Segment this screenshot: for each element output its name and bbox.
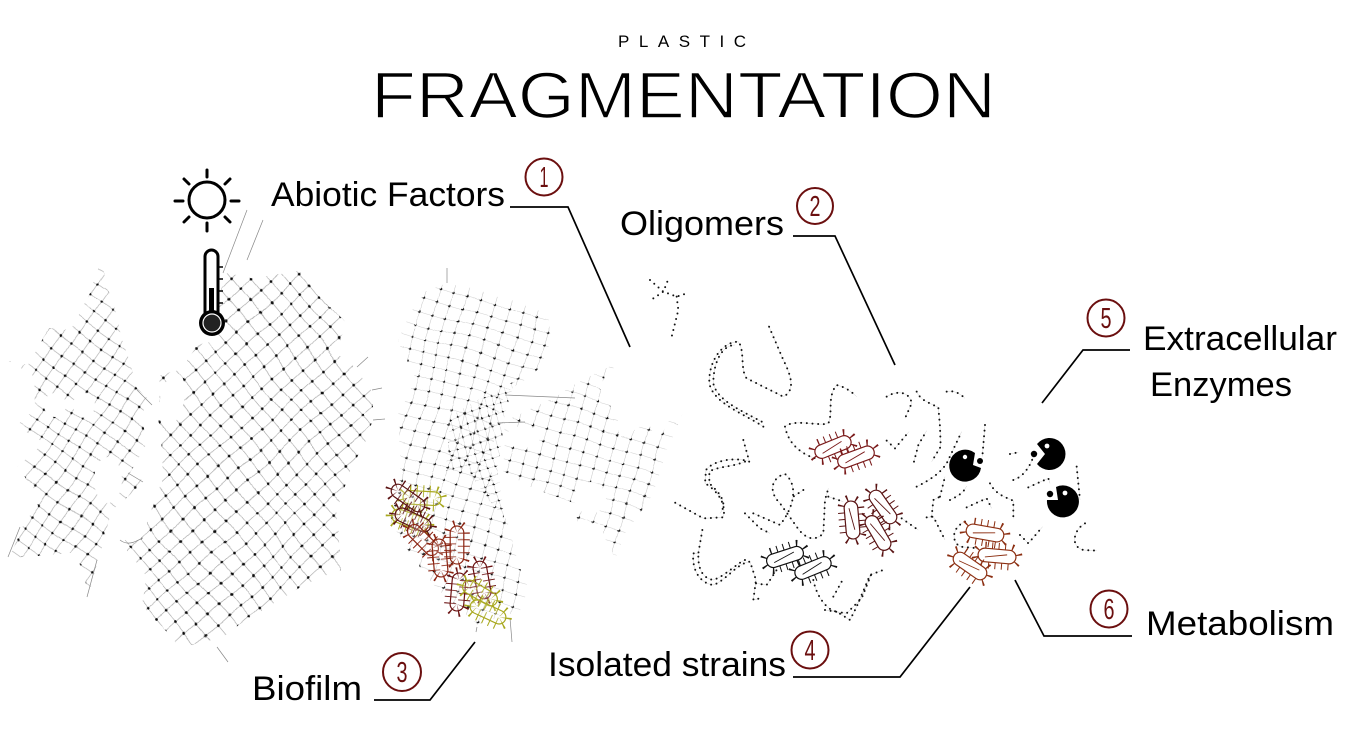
callout 6: metabolism — [1015, 580, 1334, 643]
polymer mesh: right fragment — [497, 360, 682, 560]
callout 6: metabolism: Metabolism — [1146, 605, 1334, 643]
callout 2: oligomers: Oligomers — [620, 205, 784, 243]
callout 5: extracellular enzymes: Enzymes — [1150, 366, 1292, 404]
callout 1: abiotic factors: Abiotic Factors — [271, 176, 505, 214]
small oligomer star — [650, 277, 687, 337]
callout 2: oligomers — [620, 188, 895, 365]
enzyme: pacman 2 — [1031, 438, 1065, 470]
callout 5: extracellular enzymes: 5 — [1100, 303, 1112, 335]
heading: fragmentation: FRAGMENTATION — [371, 58, 996, 132]
enzyme: pacman 3 — [1047, 485, 1079, 517]
callout 6: metabolism: 6 — [1104, 594, 1114, 626]
callout 3: biofilm: Biofilm — [252, 670, 362, 708]
callout 1: abiotic factors: 1 — [540, 162, 548, 194]
bacteria: orange-red cluster — [951, 523, 1017, 582]
callout 4: isolated strains: 4 — [804, 635, 816, 667]
callout 5: extracellular enzymes — [1042, 300, 1337, 404]
bacteria: dark red cluster top — [813, 434, 876, 470]
callout 5: extracellular enzymes: Extracellular — [1143, 320, 1337, 358]
subtitle: plastic: PLASTIC — [618, 32, 746, 51]
icon: sun — [175, 170, 239, 231]
oligomer chains — [675, 325, 1097, 620]
icon: thermometer — [199, 250, 225, 336]
title — [371, 32, 996, 132]
polymer mesh: left fragment — [7, 258, 152, 597]
polymer mesh: main fragment — [120, 210, 385, 662]
bacteria: dark red cluster middle — [844, 488, 899, 553]
bacteria: black cluster — [765, 545, 833, 581]
callout 4: isolated strains — [548, 587, 970, 684]
bacteria: biofilm — [389, 482, 508, 626]
callout 2: oligomers: 2 — [810, 191, 820, 223]
callout 1: abiotic factors — [271, 158, 630, 347]
polymer mesh: centre fragment — [388, 268, 548, 642]
callout 3: biofilm: 3 — [396, 657, 408, 689]
callout 4: isolated strains: Isolated strains — [548, 646, 786, 684]
callout 3: biofilm — [252, 642, 475, 708]
enzyme: pacman 1 — [949, 450, 983, 482]
